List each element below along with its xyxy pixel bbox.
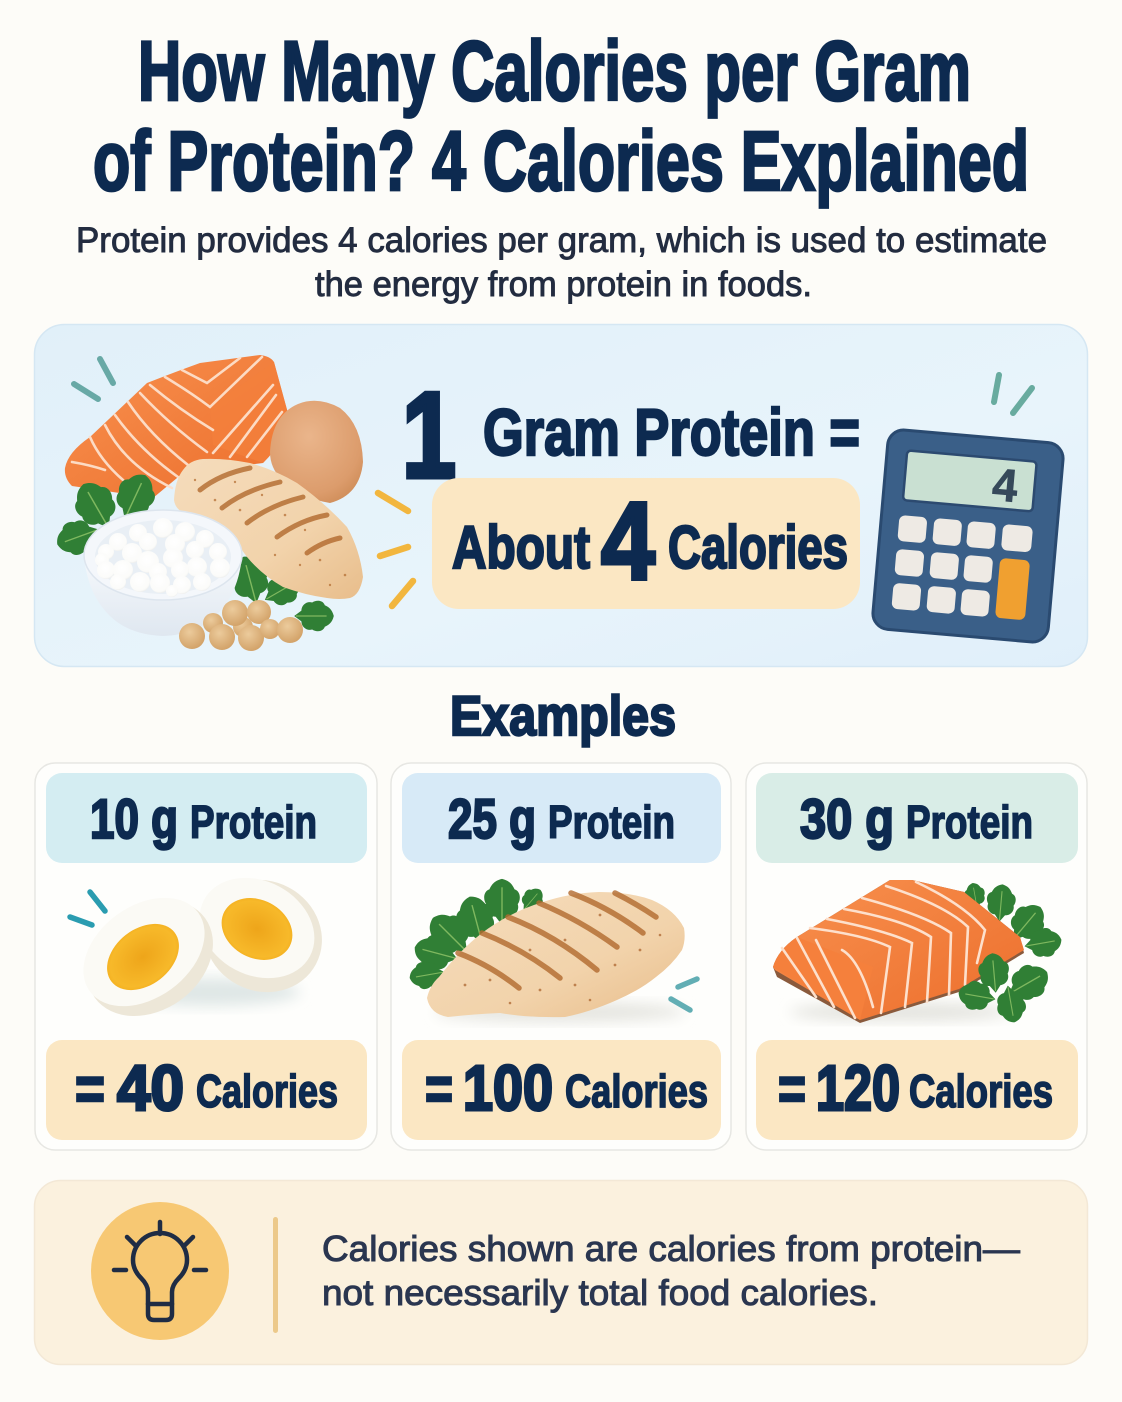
card: 30 g protein	[746, 763, 1087, 1150]
card: 30 g protein: 120	[816, 1052, 900, 1124]
card: 30 g protein: Protein	[906, 796, 1033, 848]
card: 25 g protein: 100	[463, 1052, 553, 1124]
card: 30 g protein: Calories	[909, 1065, 1053, 1117]
chickpeas	[179, 600, 303, 651]
card: 10 g protein: Protein	[190, 796, 317, 848]
subtitle: Protein provides 4 calories per gram, which is used to estimate	[76, 221, 1047, 260]
icon: salmon with greens	[773, 880, 1064, 1025]
panel: key fact	[34, 324, 1088, 666]
icon: light bulb	[91, 1202, 229, 1340]
bowl of cottage cheese	[84, 510, 242, 636]
subtitle	[76, 221, 1047, 304]
pill: about 4 calories: About	[452, 514, 590, 581]
card: 10 g protein: 10 g	[90, 787, 178, 850]
big number 1: 1	[402, 367, 456, 503]
heading: examples: Examples	[450, 684, 676, 747]
accent ticks yellow	[378, 493, 413, 606]
panel: note	[34, 1180, 1088, 1364]
pill: about 4 calories	[432, 478, 860, 609]
pill: about 4 calories: 4	[601, 480, 655, 603]
accent ticks teal	[74, 359, 113, 399]
title	[93, 24, 1029, 208]
note text	[322, 1228, 1020, 1313]
card: 25 g protein: Protein	[548, 796, 675, 848]
egg	[270, 401, 363, 503]
pill: about 4 calories: Calories	[668, 514, 848, 581]
salmon fillet	[65, 355, 289, 498]
card: 30 g protein: 30 g	[800, 787, 894, 850]
card: 25 g protein: Calories	[565, 1065, 708, 1117]
subtitle: the energy from protein in foods.	[315, 265, 812, 304]
icon: grilled chicken	[407, 879, 697, 1022]
heading: gram protein: Gram Protein =	[483, 395, 860, 469]
icon: calculator: 4	[990, 458, 1020, 512]
card: 10 g protein: 40	[117, 1052, 184, 1124]
card: 10 g protein: Calories	[196, 1065, 338, 1117]
card: 25 g protein	[391, 763, 731, 1150]
card: 25 g protein: =	[425, 1055, 453, 1124]
icon: protein foods	[52, 355, 363, 651]
icon: boiled egg halves	[63, 858, 342, 1040]
note text: not necessarily total food calories.	[322, 1272, 878, 1313]
note text: Calories shown are calories from protein—	[322, 1228, 1020, 1269]
card: 30 g protein: =	[778, 1055, 806, 1124]
card: 10 g protein: =	[75, 1055, 105, 1124]
card: 10 g protein	[35, 763, 377, 1150]
icon: calculator	[872, 429, 1064, 643]
leaves	[52, 467, 334, 631]
chicken breast	[174, 459, 363, 599]
card: 25 g protein: 25 g	[448, 787, 536, 850]
accent ticks calculator	[994, 375, 1032, 413]
